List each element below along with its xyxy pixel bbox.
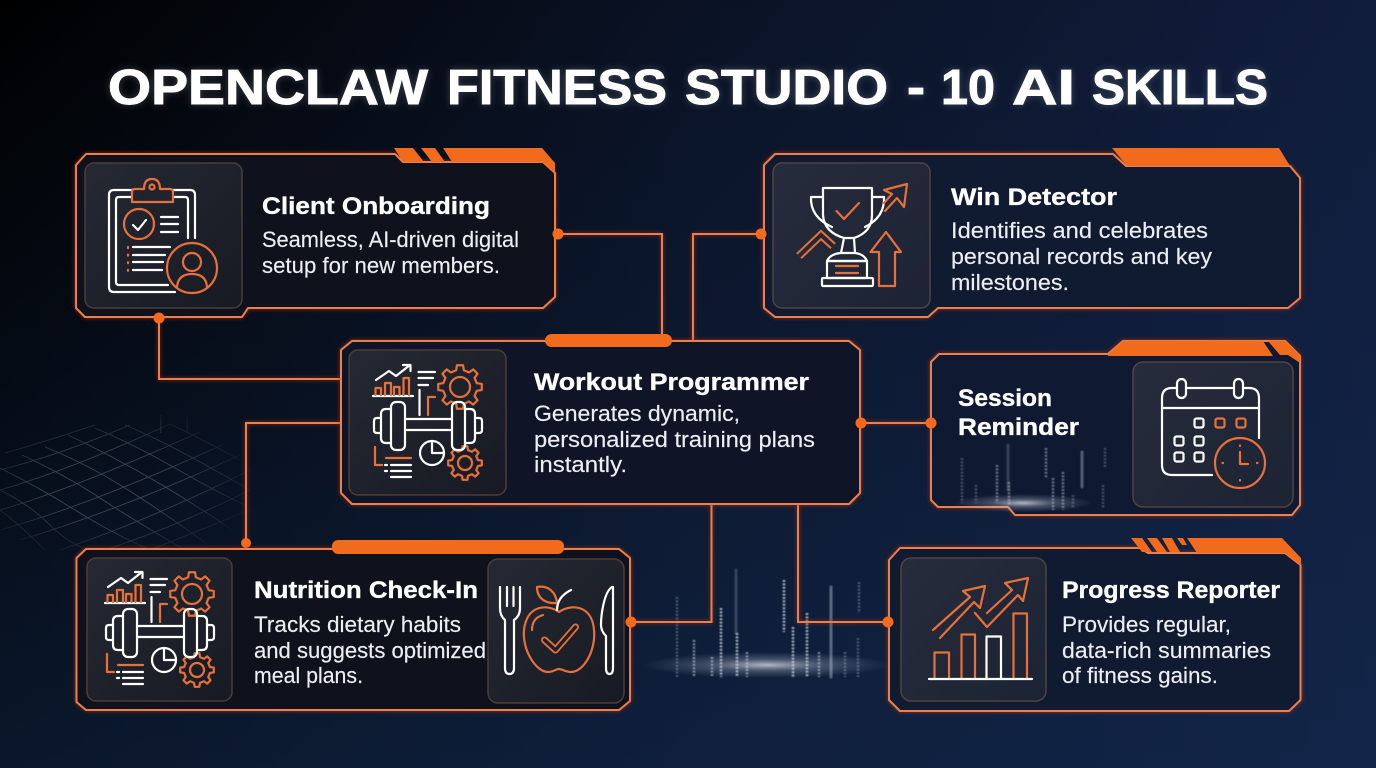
heading: Reminder <box>958 414 1079 441</box>
description <box>262 227 519 278</box>
heading: Win Detector <box>951 184 1117 211</box>
title: OPENCLAW <box>108 61 429 115</box>
icon: clipboard with user <box>109 179 217 293</box>
panel: workout programmer <box>341 334 860 504</box>
panel: progress reporter <box>889 538 1301 711</box>
description: Seamless, AI-driven digital <box>262 227 519 252</box>
connectors <box>159 234 931 622</box>
description: Tracks dietary habits <box>254 612 461 637</box>
connector node right <box>626 616 636 628</box>
description <box>1062 612 1271 688</box>
heading: Nutrition Check-In <box>254 577 478 604</box>
header pill <box>545 334 672 347</box>
panel: win detector <box>764 148 1300 317</box>
panel: client onboarding <box>76 148 555 317</box>
heading <box>958 385 1079 441</box>
left icon box <box>87 558 232 701</box>
description: data-rich summaries <box>1062 638 1271 663</box>
icon box <box>901 558 1046 701</box>
description: setup for new members. <box>262 253 500 278</box>
description: milestones. <box>951 270 1069 295</box>
icon: trophy <box>799 184 907 286</box>
icon box <box>1133 362 1293 507</box>
panel outline <box>931 341 1300 515</box>
description: personal records and key <box>951 244 1212 269</box>
description: Provides regular, <box>1062 612 1231 637</box>
data light towers <box>953 445 1105 512</box>
data light towers centre <box>642 570 892 678</box>
header pill <box>332 540 564 554</box>
icon: dumbbell with charts and gears <box>373 365 482 480</box>
header tab <box>394 148 555 173</box>
description: and suggests optimized <box>254 638 486 663</box>
right icon box <box>488 559 624 703</box>
description: meal plans. <box>254 663 363 688</box>
title: FITNESS <box>447 61 667 115</box>
icon: fork apple knife <box>500 587 613 674</box>
header tab <box>1112 148 1290 166</box>
title: - <box>907 61 925 115</box>
title: STUDIO <box>685 61 888 115</box>
panel: session reminder <box>931 341 1300 515</box>
description <box>951 218 1212 295</box>
description <box>534 401 815 477</box>
title <box>108 61 1268 115</box>
description: Identifies and celebrates <box>951 218 1208 243</box>
icon box <box>85 163 242 308</box>
header tab <box>1131 538 1301 565</box>
connector nodes <box>154 228 936 628</box>
panel: nutrition check-in <box>76 540 636 710</box>
panel outline <box>341 341 860 504</box>
panel outline <box>76 154 555 317</box>
heading: Workout Programmer <box>534 369 809 396</box>
icon: rising bar chart <box>929 578 1032 679</box>
icon: calendar with clock <box>1162 379 1265 488</box>
title: SKILLS <box>1092 61 1268 115</box>
panel outline <box>889 548 1300 711</box>
icon: dumbbell with charts and gears <box>105 572 214 687</box>
icon box <box>773 163 930 308</box>
background wave mesh <box>0 408 250 550</box>
heading: Progress Reporter <box>1062 577 1280 604</box>
description <box>254 612 486 688</box>
description: instantly. <box>534 452 627 477</box>
header tab <box>1108 341 1300 363</box>
description: of fitness gains. <box>1062 663 1218 688</box>
title: AI <box>1012 61 1075 115</box>
description: personalized training plans <box>534 427 815 452</box>
title: 10 <box>941 61 995 115</box>
icon box <box>349 350 506 495</box>
panel outline <box>76 549 630 710</box>
heading: Client Onboarding <box>262 193 490 220</box>
description: Generates dynamic, <box>534 401 740 426</box>
heading: Session <box>958 385 1052 412</box>
panel outline <box>764 154 1300 317</box>
